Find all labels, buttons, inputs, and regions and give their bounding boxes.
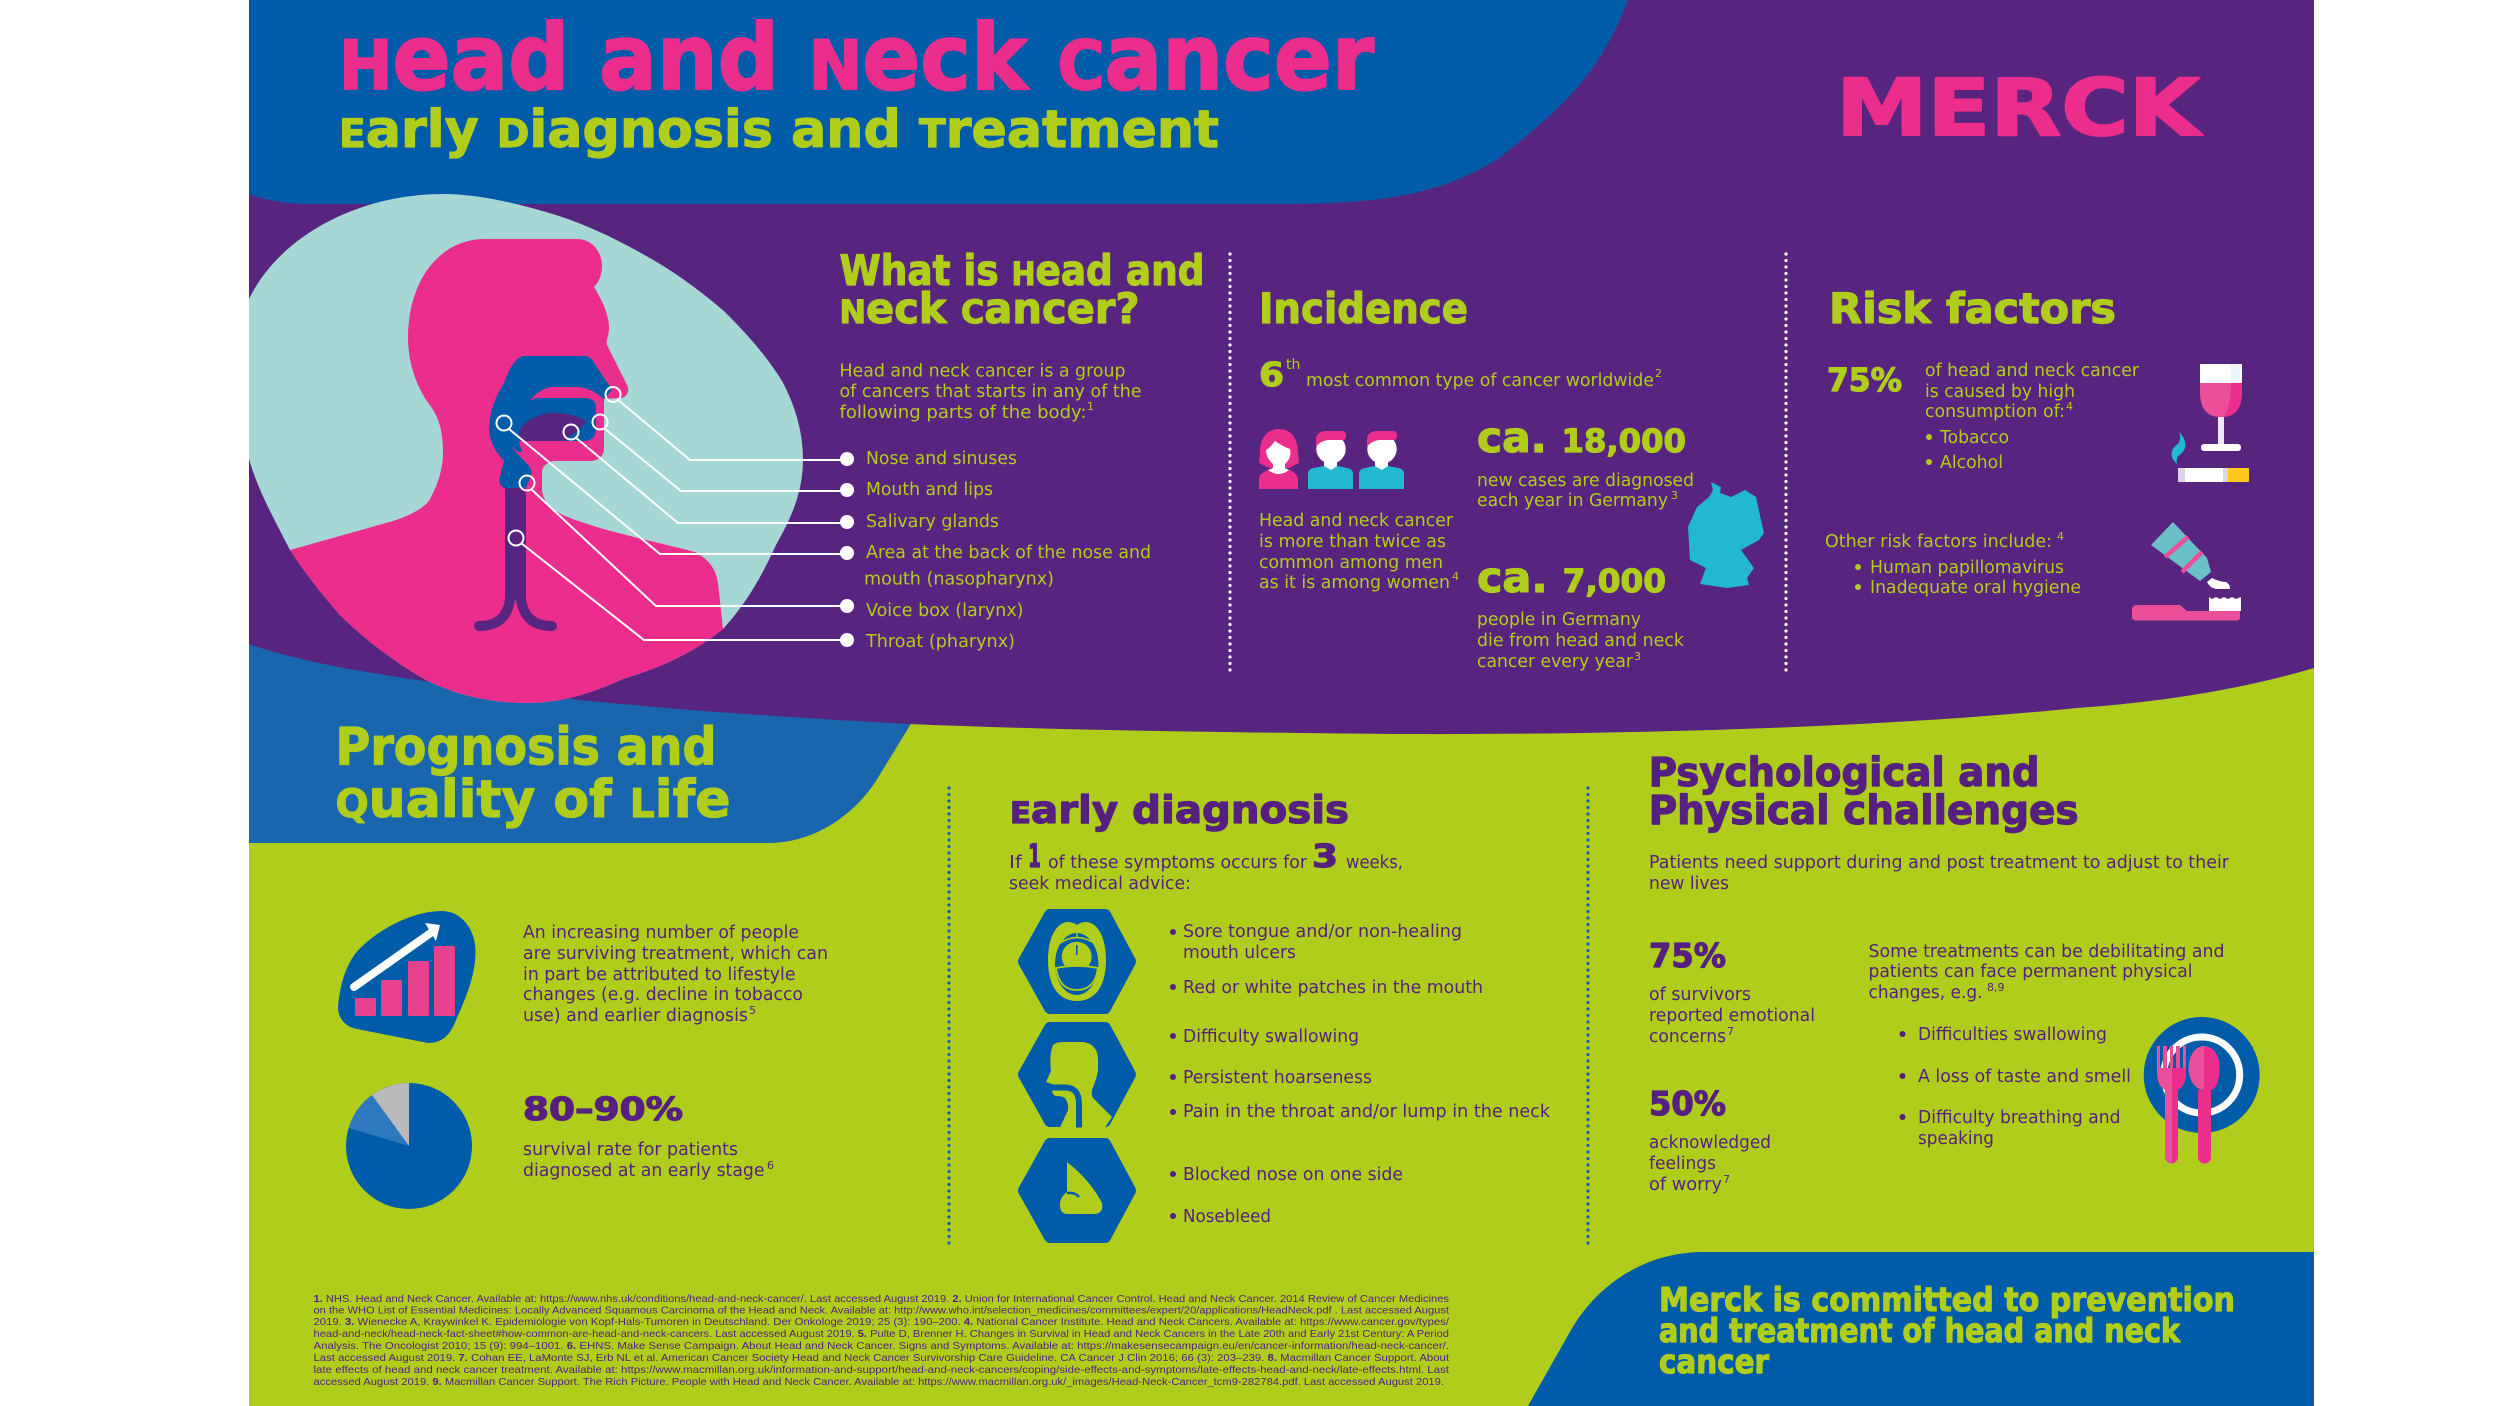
stat: new cases: new cases are diagnosed xyxy=(1477,470,1694,491)
stat: 75 percent survivors: of survivors xyxy=(1649,984,1751,1005)
gender text xyxy=(1259,510,1459,593)
intro text xyxy=(840,360,1142,423)
stat: 75 percent survivors: concerns xyxy=(1649,1026,1726,1047)
survival text: use) and earlier diagnosis xyxy=(523,1005,748,1026)
stat: 75 percent: Alcohol xyxy=(1940,452,2003,473)
symptoms list: Persistent hoarseness xyxy=(1183,1067,1372,1088)
treatments text: Difficulty breathing and xyxy=(1918,1107,2120,1128)
callout lines xyxy=(496,387,847,640)
references: Last accessed August 2019. 7. Cohan EE, LaMonte SJ, Erb NL et al. American Cancer Society Head and Neck Cancer Survivorship Care Guideline. CA Cancer J Clin 2016; 66 (3): 203–239. 8. Macmillan Cancer Support. About xyxy=(314,1352,1449,1364)
symptoms intro: seek medical advice: xyxy=(1009,873,1191,894)
panel: psychological and physical challenges xyxy=(1649,750,2260,1195)
symptoms intro: 3 xyxy=(1312,837,1338,875)
gender text: as it is among women xyxy=(1259,572,1450,593)
icon: head profile with throat xyxy=(1024,1028,1130,1128)
bottom blue commitment banner xyxy=(1528,1252,2314,1406)
stat: deaths xyxy=(1477,553,1685,672)
symptoms list xyxy=(1170,921,1551,1227)
stat: 75 percent survivors: reported emotional xyxy=(1649,1005,1815,1026)
other risk factors text: Human papillomavirus xyxy=(1870,557,2064,578)
intro text xyxy=(1649,852,2230,894)
stat: new cases: each year in Germany xyxy=(1477,490,1668,511)
sixth most common: th xyxy=(1286,357,1300,373)
body part labels: Salivary glands xyxy=(866,511,999,532)
symptoms intro: 1 xyxy=(1028,837,1041,875)
prognosis blue banner xyxy=(249,644,911,843)
intro text: following parts of the body: xyxy=(840,402,1086,423)
references xyxy=(314,1293,1449,1388)
symptoms list: mouth ulcers xyxy=(1183,942,1296,963)
heading: What is Head and xyxy=(840,246,1204,295)
icon: plate with fork and spoon xyxy=(2144,1017,2260,1164)
commitment statement: Merck is committed to prevention xyxy=(1659,1280,2235,1319)
stat: 80 to 90 percent: diagnosed at an early stage xyxy=(523,1160,764,1181)
survival text: are surviving treatment, which can xyxy=(523,943,828,964)
panel: prognosis and quality of life xyxy=(336,718,828,1209)
icon: people xyxy=(1259,429,1404,489)
heading: Neck Cancer? xyxy=(840,284,1140,333)
divider dotted blue left xyxy=(947,788,951,1244)
treatments text: Some treatments can be debilitating and xyxy=(1868,941,2224,962)
oral cavity xyxy=(519,413,586,441)
stat: 80 to 90 percent: 6 xyxy=(767,1159,774,1172)
icon: map of Germany xyxy=(1688,482,1764,588)
teal blob xyxy=(249,194,803,703)
intro text: Patients need support during and post treatment to adjust to their xyxy=(1649,852,2230,873)
symptoms list: Blocked nose on one side xyxy=(1183,1164,1403,1185)
purple upper band xyxy=(249,0,2314,734)
lime background xyxy=(249,668,2314,1406)
panel: incidence xyxy=(1259,284,1764,672)
stat: 75 percent: is caused by high xyxy=(1925,381,2075,402)
icon: cigarette xyxy=(2172,432,2249,482)
other risk factors text: Inadequate oral hygiene xyxy=(1870,577,2081,598)
divider dotted blue right xyxy=(1586,788,1590,1244)
top blue title banner xyxy=(249,0,1628,204)
subtitle: Early Diagnosis and Treatment xyxy=(339,100,1219,160)
heading: Risk factors xyxy=(1829,284,2116,333)
heading xyxy=(840,246,1204,333)
treatments text: 8,9 xyxy=(1987,981,2004,994)
gender text: is more than twice as xyxy=(1259,531,1446,552)
icon: wine glass xyxy=(2200,364,2242,451)
symptoms list: Difficulty swallowing xyxy=(1183,1026,1359,1047)
symptoms list: Red or white patches in the mouth xyxy=(1183,977,1483,998)
treatments text: patients can face permanent physical xyxy=(1868,961,2192,982)
symptoms list: Nosebleed xyxy=(1183,1206,1271,1227)
references: 1. NHS. Head and Neck Cancer. Available at: https://www.nhs.uk/conditions/head-and-neck-cancer/. Last accessed August 2019. 2. Union for International Cancer Control. Head and Neck Cancer. 2014 Review of Cancer Medicines xyxy=(314,1293,1449,1305)
body part labels xyxy=(864,448,1151,652)
trachea xyxy=(474,488,557,631)
logo: Merck: MERCK xyxy=(1836,64,2203,154)
icon: rising bar chart xyxy=(338,911,476,1043)
symptoms intro xyxy=(1009,837,1403,894)
references: accessed August 2019. 9. Macmillan Cancer Support. The Rich Picture. People with Head and Neck Cancer. Available at: https://www.macmillan.org.uk/_images/Head-Neck-Cancer_tcm9-282784.pdf. Last accessed August 2019. xyxy=(314,1376,1444,1388)
symptoms list: Sore tongue and/or non-healing xyxy=(1183,921,1462,942)
treatments text xyxy=(1868,941,2224,1149)
commitment statement: and treatment of head and neck xyxy=(1659,1311,2181,1350)
panel: early diagnosis xyxy=(1009,788,1551,1237)
intro text: new lives xyxy=(1649,873,1729,894)
title: Head and Neck Cancer xyxy=(339,6,1374,111)
stat: 80 to 90 percent: 80–90% xyxy=(523,1090,683,1128)
divider dotted white right xyxy=(1784,254,1788,672)
stat: 75 percent xyxy=(1827,360,2140,473)
stat: 75 percent: 4 xyxy=(2066,400,2073,413)
sixth most common xyxy=(1259,355,1662,394)
survival text: 5 xyxy=(749,1004,756,1017)
stat: 75 percent: of head and neck cancer xyxy=(1925,360,2140,381)
references: on the WHO List of Essential Medicines: Locally Advanced Squamous Carcinoma of the Head and Neck. Available at: http://www.who.int/selection_medicines/committees/expert/20/applications/HeadNeck.pdf . Last accessed August xyxy=(314,1304,1449,1316)
heading xyxy=(336,718,730,830)
treatments text: Difficulties swallowing xyxy=(1918,1024,2107,1045)
stat: deaths: ca. 7,000 xyxy=(1477,553,1666,602)
commitment statement: cancer xyxy=(1659,1342,1770,1381)
icon: nose xyxy=(1024,1144,1130,1237)
survival text: in part be attributed to lifestyle xyxy=(523,964,796,985)
stat: 75 percent survivors xyxy=(1649,936,1815,1047)
illustration: head and neck anatomy xyxy=(249,194,854,730)
body part labels: mouth (nasopharynx) xyxy=(864,568,1054,590)
gender text: Head and neck cancer xyxy=(1259,510,1454,531)
stat: deaths: 3 xyxy=(1634,650,1641,663)
stat: 75 percent survivors: 7 xyxy=(1727,1025,1734,1038)
panel: risk factors xyxy=(1825,284,2249,620)
references: head-and-neck/head-neck-fact-sheet#how-common-are-head-and-neck-cancers. Last accessed August 2019. 5. Pulte D, Brenner H. Changes in Survival in Head and Neck Cancers in the Late 20th and Early 21st Century: A Period xyxy=(314,1328,1449,1340)
sixth most common: 6 xyxy=(1259,355,1284,394)
body part labels: Throat (pharynx) xyxy=(865,631,1015,652)
body part labels: Area at the back of the nose and xyxy=(866,542,1151,563)
stat: deaths: cancer every year xyxy=(1477,651,1634,672)
survival text: An increasing number of people xyxy=(523,922,799,943)
body part labels: Nose and sinuses xyxy=(866,448,1017,469)
stat: deaths: people in Germany xyxy=(1477,609,1641,630)
other risk factors text xyxy=(1825,530,2081,598)
other risk factors text: 4 xyxy=(2057,530,2064,543)
heading: Physical challenges xyxy=(1649,788,2079,834)
treatments text: speaking xyxy=(1918,1128,1994,1149)
body part labels: Mouth and lips xyxy=(866,479,993,500)
stat: 50 percent worry: 7 xyxy=(1723,1173,1730,1186)
gender text: common among men xyxy=(1259,552,1443,573)
panel: what is head and neck cancer xyxy=(840,246,1204,652)
heading: Incidence xyxy=(1259,284,1468,333)
stat: 50 percent worry: 50% xyxy=(1649,1084,1726,1123)
intro text: Head and neck cancer is a group xyxy=(840,360,1126,382)
commitment statement xyxy=(1659,1280,2235,1381)
treatments text: A loss of taste and smell xyxy=(1918,1066,2131,1087)
stat: 80 to 90 percent: survival rate for patients xyxy=(523,1139,738,1160)
stat: 50 percent worry xyxy=(1649,1084,1771,1195)
symptoms intro: weeks, xyxy=(1346,852,1403,873)
stat: 50 percent worry: feelings xyxy=(1649,1153,1716,1174)
intro text: 1 xyxy=(1087,400,1094,413)
stat: new cases: 3 xyxy=(1671,489,1678,502)
heading xyxy=(1649,750,2079,834)
stat: 50 percent worry: of worry xyxy=(1649,1174,1722,1195)
references: Analysis. The Oncologist 2010; 15 (9): 994–1001. 6. EHNS. Make Sense Campaign. About Head and Neck Cancer. Signs and Symptoms. Available at: https://makesensecampaign.eu/en/cancer-information/head-neck-cancer/. xyxy=(314,1340,1449,1352)
sixth most common: most common type of cancer worldwide xyxy=(1306,370,1654,391)
stat: 80 to 90 percent xyxy=(523,1090,774,1181)
symptoms list: Pain in the throat and/or lump in the neck xyxy=(1183,1101,1551,1122)
stat: 75 percent: consumption of: xyxy=(1925,401,2065,422)
icon: toothpaste and brush xyxy=(2132,522,2241,620)
stat: 75 percent: 75% xyxy=(1827,361,1902,399)
intro text: of cancers that starts in any of the xyxy=(840,381,1142,402)
stat: deaths: die from head and neck xyxy=(1477,630,1685,651)
other risk factors text: Other risk factors include: xyxy=(1825,531,2052,552)
pink head silhouette xyxy=(290,239,723,703)
stat: new cases xyxy=(1477,413,1694,511)
treatments text: changes, e.g. xyxy=(1868,982,1982,1003)
pharynx and nasal cavity xyxy=(489,356,612,490)
stat: 50 percent worry: acknowledged xyxy=(1649,1132,1771,1153)
heading: Prognosis and xyxy=(336,718,716,778)
heading: Early diagnosis xyxy=(1010,788,1349,832)
divider dotted white left xyxy=(1228,254,1232,672)
survival text: changes (e.g. decline in tobacco xyxy=(523,984,803,1005)
survival text xyxy=(523,922,828,1026)
stat: 75 percent survivors: 75% xyxy=(1649,936,1726,975)
symptoms intro: If xyxy=(1009,852,1023,873)
references: late effects of head and neck cancer treatment. Available at: https://www.macmillan.org.uk/information-and-support/head-and-neck-cancers/coping/side-effects-and-symptoms/late-effects-head-and-neck/late-effects.html. Last xyxy=(314,1364,1449,1376)
stat: 75 percent: Tobacco xyxy=(1939,427,2009,448)
references: 2019. 3. Wienecke A, Kraywinkel K. Epidemiologie von Kopf-Hals-Tumoren in Deutschland. Der Onkologe 2019; 25 (3): 190–200. 4. National Cancer Institute. Head and Neck Cancers. Available at: https://www.cancer.gov/types/ xyxy=(314,1316,1449,1328)
body part labels: Voice box (larynx) xyxy=(866,600,1024,621)
icon: open mouth xyxy=(1024,915,1130,1008)
gender text: 4 xyxy=(1452,570,1459,583)
sixth most common: 2 xyxy=(1655,367,1662,380)
pie chart xyxy=(346,1083,472,1209)
heading: Psychological and xyxy=(1649,750,2040,796)
stat: new cases: ca. 18,000 xyxy=(1477,413,1686,462)
symptoms intro: of these symptoms occurs for xyxy=(1048,852,1308,873)
heading: Quality of Life xyxy=(336,770,730,830)
